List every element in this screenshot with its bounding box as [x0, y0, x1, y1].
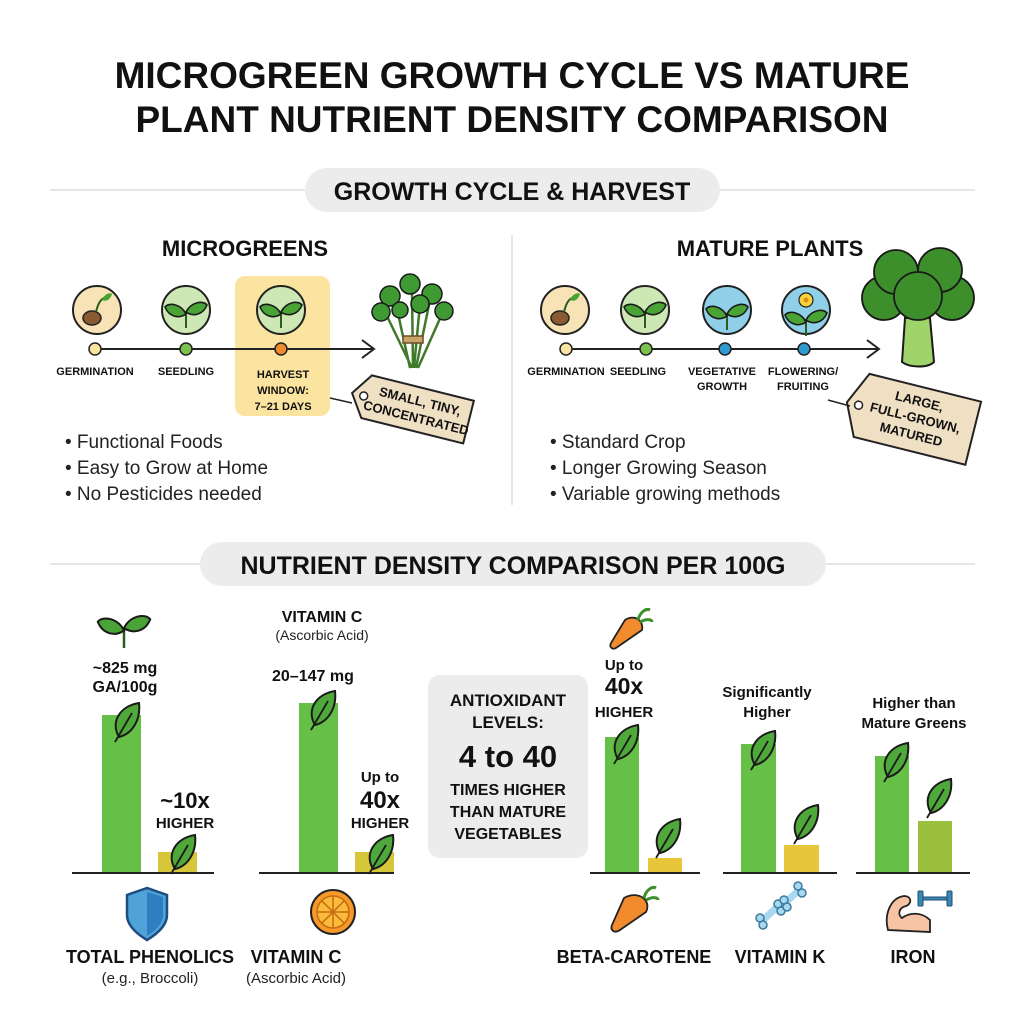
tag: large full-grown matured: MATURED [878, 419, 944, 449]
section header: growth cycle: GROWTH CYCLE & HARVEST [334, 178, 690, 206]
icon: vegetative [703, 286, 751, 334]
chart: beta-carotene [557, 609, 711, 967]
stage labels: VEGETATIVE [688, 366, 756, 378]
chart: vitamin k: Significantly [722, 684, 812, 701]
icon: harvest sprout [257, 286, 305, 334]
chart: total phenolics: (e.g., Broccoli) [102, 970, 198, 987]
chart: iron: IRON [890, 947, 936, 967]
icon: seedling [621, 286, 669, 334]
chart: vitamin c: 40x [360, 787, 401, 814]
icon: flowering [782, 286, 830, 336]
bullets: mature plants: • Variable growing methods [550, 484, 780, 505]
chart: iron: Higher than [872, 695, 956, 712]
chart: vitamin k: VITAMIN K [735, 947, 825, 967]
stage labels: HARVEST [257, 369, 309, 381]
chart: total phenolics: ~10x [160, 788, 211, 813]
stage labels: 7–21 DAYS [254, 401, 312, 413]
stage labels: GERMINATION [527, 366, 605, 378]
icon: seedling [162, 286, 210, 334]
timeline [560, 340, 879, 358]
stage labels [56, 366, 312, 413]
panel: microgreens [56, 236, 476, 505]
section header: nutrient density [200, 542, 826, 586]
tag: small tiny concentrated: SMALL, TINY, [378, 384, 463, 419]
chart: total phenolics [66, 616, 234, 987]
stage labels: SEEDLING [158, 366, 214, 378]
icon: orange slice [311, 890, 355, 934]
bullets: microgreens [65, 432, 268, 505]
bullets: mature plants: • Standard Crop [550, 432, 686, 453]
chart: beta-carotene: Up to [605, 657, 643, 674]
stage labels: SEEDLING [610, 366, 666, 378]
icon: germination [541, 286, 589, 334]
stage labels: GERMINATION [56, 366, 134, 378]
chart: vitamin c: (Ascorbic Acid) [246, 970, 346, 987]
icon: bones [756, 882, 806, 929]
stage labels: WINDOW: [257, 385, 309, 397]
title [115, 55, 909, 140]
bullets: mature plants [550, 432, 780, 505]
tag: small tiny concentrated [347, 372, 476, 444]
stage labels: FLOWERING/ [768, 366, 838, 378]
icon: microgreen bunch [372, 274, 453, 368]
icon: broccoli [862, 248, 974, 366]
icon: muscle arm with dumbbell [887, 891, 952, 932]
callout: antioxidant levels: ANTIOXIDANT [450, 691, 567, 710]
callout: antioxidant levels: TIMES HIGHER [450, 782, 566, 799]
chart: total phenolics: ~825 mg [93, 660, 157, 677]
chart: vitamin k: Higher [743, 704, 791, 721]
bullets: microgreens: • Easy to Grow at Home [65, 458, 268, 479]
chart: vitamin c: (Ascorbic Acid) [275, 627, 369, 643]
chart: vitamin k [722, 684, 837, 967]
chart: beta-carotene: HIGHER [595, 704, 653, 721]
chart: vitamin c [246, 609, 409, 987]
callout: antioxidant levels: VEGETABLES [454, 826, 562, 843]
stage labels [527, 366, 838, 393]
callout: antioxidant levels: THAN MATURE [450, 804, 566, 821]
heading: microgreens: MICROGREENS [162, 236, 328, 261]
title: PLANT NUTRIENT DENSITY COMPARISON [135, 99, 889, 140]
tag: small tiny concentrated: CONCENTRATED [362, 397, 470, 438]
bullets: microgreens: • No Pesticides needed [65, 484, 262, 505]
chart: beta-carotene: BETA-CAROTENE [557, 947, 711, 967]
chart: vitamin c: VITAMIN C [282, 609, 363, 626]
callout: antioxidant levels: LEVELS: [472, 713, 544, 732]
stage labels: FRUITING [777, 381, 829, 393]
icon: germination [73, 286, 121, 334]
section header: nutrient density: NUTRIENT DENSITY COMPARISON PER 100G [240, 552, 786, 580]
tag: large full-grown matured: FULL-GROWN, [869, 399, 962, 436]
chart: iron [856, 695, 970, 967]
callout: antioxidant levels: 4 to 40 [459, 739, 557, 774]
chart: total phenolics: GA/100g [93, 679, 157, 696]
chart: vitamin c: Up to [361, 769, 399, 786]
chart: total phenolics: TOTAL PHENOLICS [66, 947, 234, 967]
stage labels: GROWTH [697, 381, 747, 393]
bullets: mature plants: • Longer Growing Season [550, 458, 767, 479]
icon: carrot [611, 887, 658, 932]
chart: vitamin c: HIGHER [351, 815, 409, 832]
callout: antioxidant levels [428, 675, 588, 858]
tag: large full-grown matured [839, 370, 981, 465]
chart: iron: Mature Greens [861, 715, 967, 732]
bullets: microgreens: • Functional Foods [65, 432, 223, 453]
icon: carrot top [610, 609, 652, 649]
heading: mature plants: MATURE PLANTS [677, 236, 863, 261]
panel: mature plants [527, 236, 981, 505]
harvest window highlight [235, 276, 330, 416]
title: MICROGREEN GROWTH CYCLE VS MATURE [115, 55, 909, 96]
tag: large full-grown matured: LARGE, [894, 388, 945, 414]
timeline [89, 340, 374, 358]
chart: vitamin c: 20–147 mg [272, 668, 354, 685]
chart: vitamin c: VITAMIN C [251, 947, 341, 967]
icon: shield [127, 888, 167, 940]
section header: growth cycle [305, 168, 720, 212]
chart: beta-carotene: 40x [605, 673, 643, 699]
chart: total phenolics: HIGHER [156, 815, 214, 832]
